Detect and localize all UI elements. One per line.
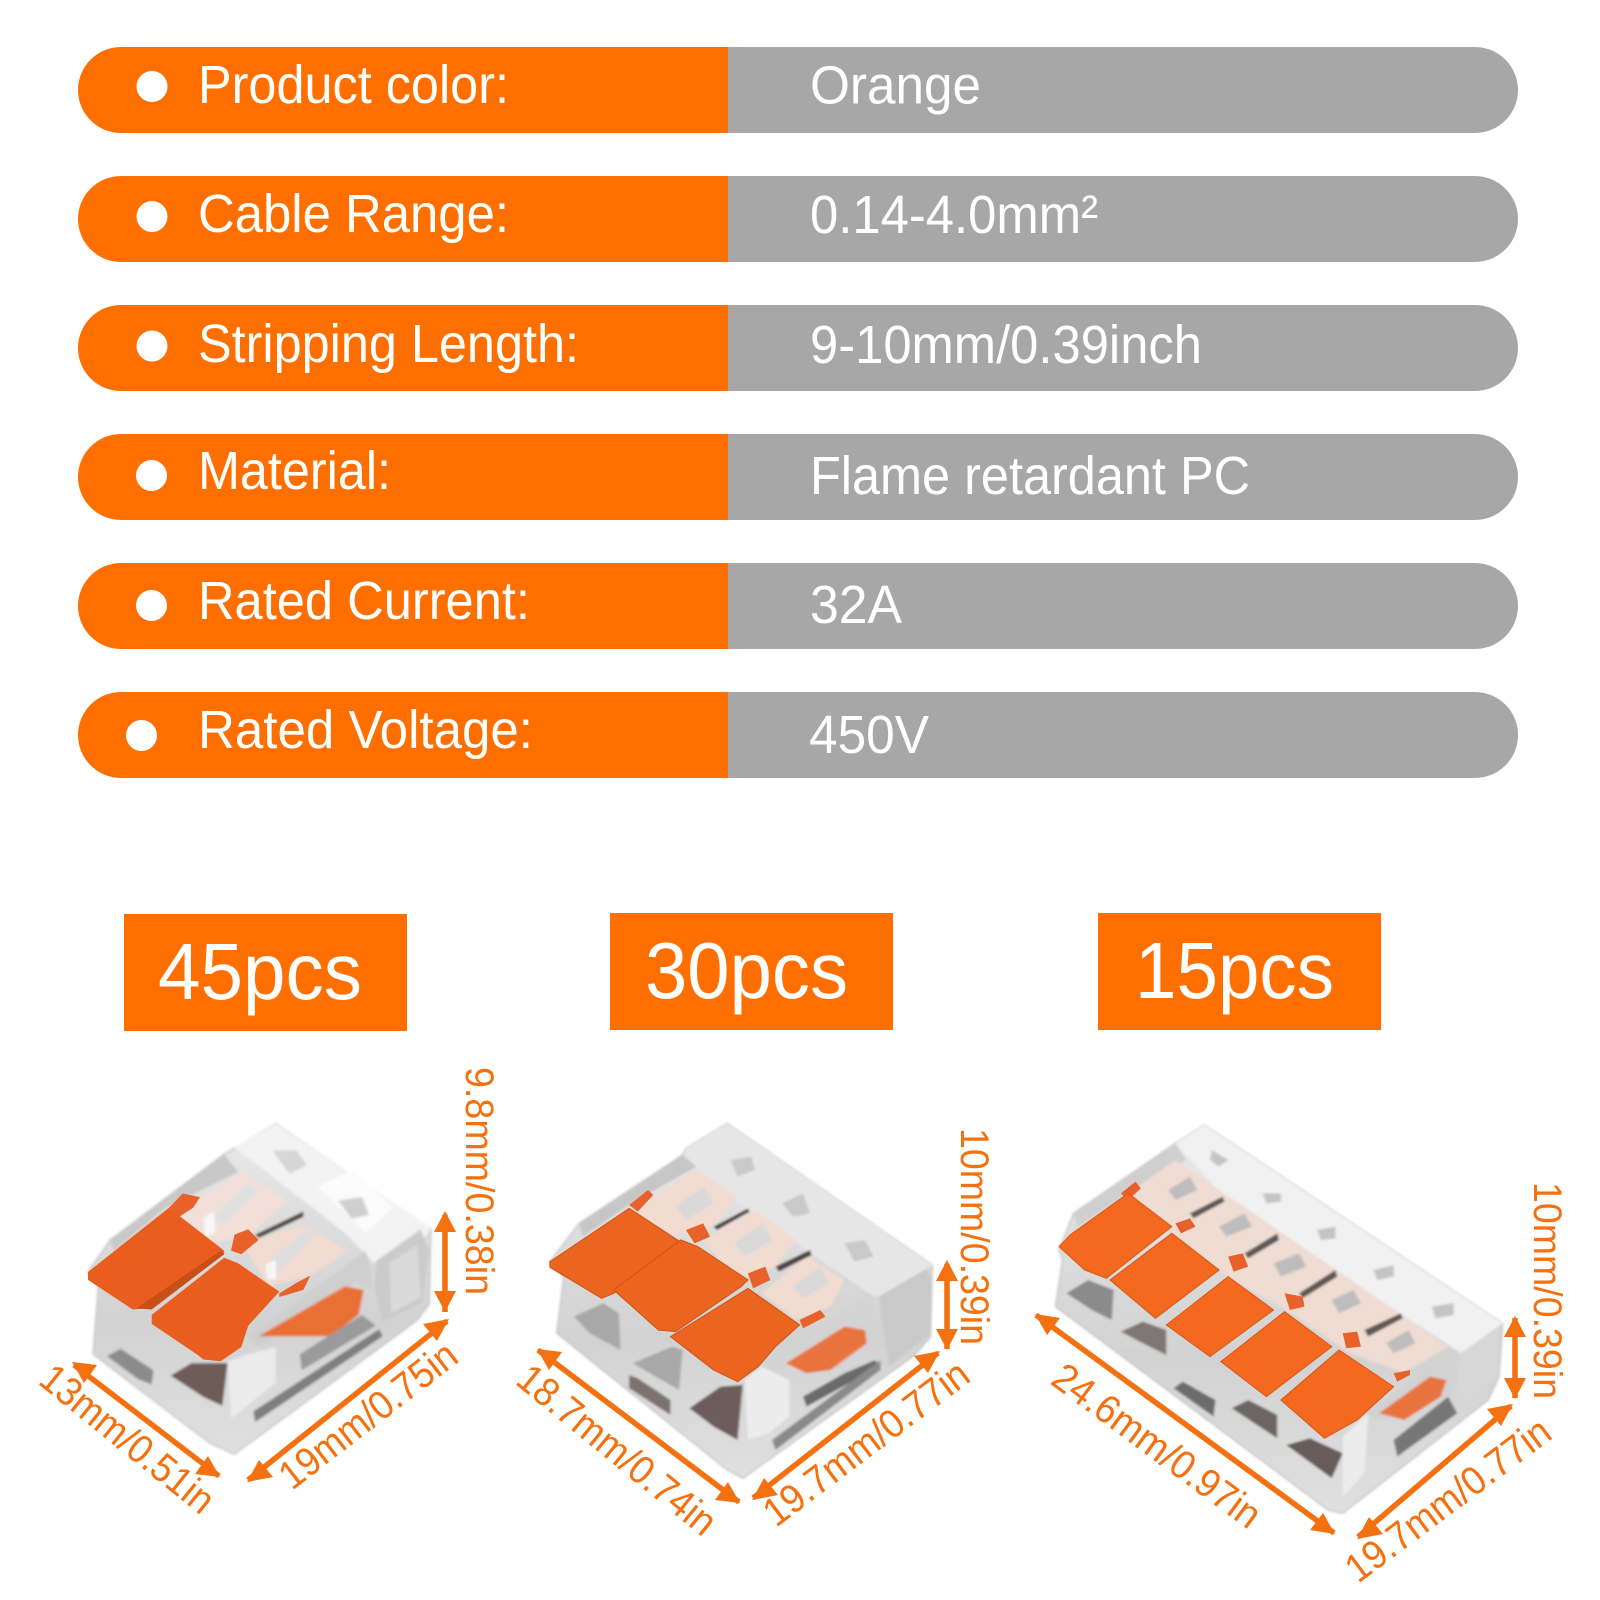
spec row: material: Flame retardant PC — [810, 446, 1250, 506]
spec row: product color: Product color: — [198, 55, 509, 115]
spec row: material: Material: — [198, 441, 391, 501]
dimension label: 19mm: 19mm/0.75in — [271, 1333, 466, 1498]
spec row: cable range: 0.14-4.0mm² — [810, 185, 1098, 245]
spec row: stripping length: 9-10mm/0.39inch — [810, 315, 1202, 375]
dimension label: 24.6mm: 24.6mm/0.97in — [1044, 1355, 1269, 1537]
badge: 15pcs — [1098, 913, 1381, 1030]
spec row: stripping length: Stripping Length: — [198, 314, 579, 374]
product photo: 2-way connector — [88, 1124, 431, 1454]
arrow: height 10mm right — [1504, 1316, 1526, 1399]
spec row: rated voltage: Rated Voltage: — [198, 700, 533, 760]
badge: 45pcs — [124, 914, 407, 1031]
spec row: cable range — [78, 176, 1518, 262]
spec row: material — [78, 434, 1518, 520]
spec row: rated voltage: 450V — [809, 705, 929, 765]
dimension label: 19.7mm: 19.7mm/0.77in — [755, 1352, 978, 1535]
arrow: length 19mm — [247, 1319, 449, 1482]
dimension label: 10mm right: 10mm/0.39in — [1525, 1182, 1569, 1399]
spec row: rated current: Rated Current: — [198, 571, 530, 631]
dimension label: 13mm: 13mm/0.51in — [31, 1356, 223, 1523]
dimension label: 18.7mm: 18.7mm/0.74in — [508, 1356, 725, 1545]
spec row: product color: Orange — [810, 56, 981, 116]
spec row: rated current: 32A — [810, 575, 902, 635]
dimension label: 10mm: 10mm/0.39in — [952, 1128, 996, 1345]
spec row: rated current — [78, 563, 1518, 649]
arrow: depth 18.7mm — [537, 1349, 740, 1503]
spec row: stripping length — [78, 305, 1518, 391]
arrow: height 9.8mm — [434, 1211, 456, 1312]
badge: 45pcs: 45pcs — [158, 927, 362, 1016]
badge: 30pcs: 30pcs — [645, 926, 848, 1015]
arrow: width 13mm — [72, 1362, 220, 1477]
spec row: cable range: Cable Range: — [198, 184, 509, 244]
dimension label: 19.7mm width: 19.7mm/0.77in — [1337, 1409, 1560, 1591]
product photo: 5-way connector — [1055, 1125, 1503, 1513]
badge: 15pcs: 15pcs — [1135, 926, 1334, 1015]
dimension label: 9.8mm: 9.8mm/0.38in — [457, 1067, 501, 1295]
arrow: height 10mm — [936, 1260, 958, 1350]
spec row: rated voltage — [78, 692, 1518, 778]
badge: 30pcs — [610, 913, 893, 1030]
spec row: product color — [78, 47, 1518, 133]
arrow: length 19.7mm — [752, 1351, 940, 1500]
arrow: width 19.7mm — [1357, 1404, 1513, 1539]
arrow: length 24.6mm — [1035, 1314, 1335, 1534]
product photo: 3-way connector — [550, 1123, 932, 1478]
